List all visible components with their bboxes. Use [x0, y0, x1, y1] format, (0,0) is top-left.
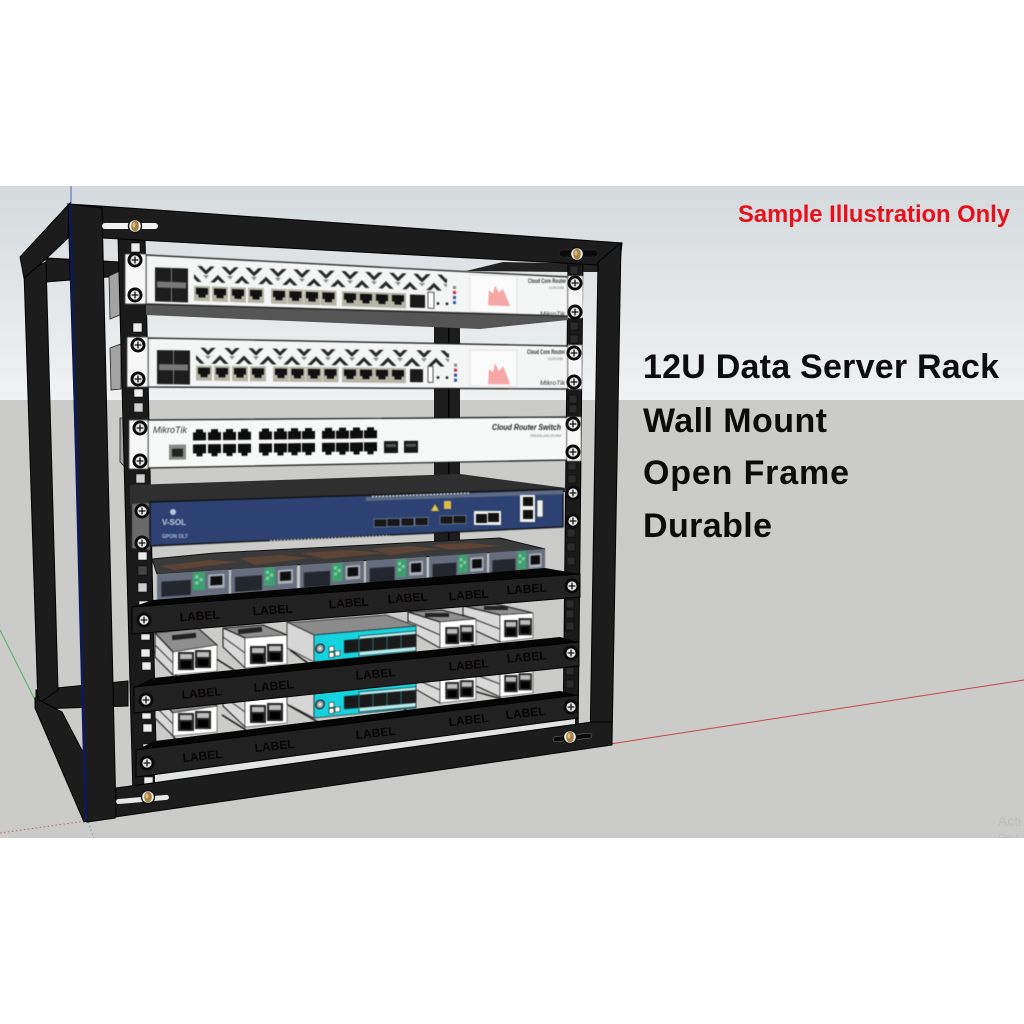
post navy edge — [70, 205, 86, 820]
bracket 3 with labels: LABEL — [355, 724, 396, 742]
device 1: shelf — [146, 304, 568, 329]
bracket 3 with labels — [136, 691, 578, 777]
light strip behind lower bracket — [155, 719, 575, 783]
bracket 1 with labels: LABEL — [506, 581, 547, 597]
model axes — [0, 186, 1024, 838]
device 3: Cloud Router Switch: Cloud Router Switch — [492, 422, 561, 432]
activation watermark — [998, 813, 1021, 844]
bracket 2 with labels — [134, 637, 579, 713]
background: sky — [0, 186, 1024, 400]
feature list: Durable — [643, 507, 772, 545]
row 5: media converters top — [152, 538, 545, 574]
device 4: V-SOL GPON OLT: V-SOL — [162, 518, 186, 527]
bottom white margin — [0, 838, 1024, 1024]
device 2: Cloud Core Router — [127, 337, 582, 389]
device 2: Cloud Core Router: CCR1036 — [548, 357, 563, 361]
bracket 3 with labels: LABEL — [448, 711, 489, 729]
back frame: top right wedge — [466, 262, 598, 272]
feature list: Open Frame — [643, 454, 849, 492]
bracket 3 with labels: LABEL — [505, 704, 546, 722]
bottom frame rail — [115, 722, 612, 817]
device 4: V-SOL GPON OLT — [132, 489, 563, 550]
bracket 2 with labels: LABEL — [181, 684, 222, 702]
mounting screws — [128, 252, 582, 770]
bracket 2 with labels: LABEL — [253, 677, 294, 695]
device 4: shelf top — [130, 474, 566, 505]
device 3: Cloud Router Switch: CRS326-24G-2S+RM — [530, 433, 561, 438]
bracket 1 with labels: LABEL — [387, 590, 428, 606]
bracket 3 with labels: LABEL — [254, 737, 295, 755]
right front post — [590, 243, 621, 746]
sample notice: Sample Illustration Only — [738, 201, 1011, 228]
front rack rails — [118, 236, 583, 796]
device 3: Cloud Router Switch: MikroTik — [153, 425, 188, 436]
activation watermark: Acti — [998, 813, 1021, 829]
activation watermark: Go t — [998, 832, 1019, 844]
back frame: left side — [20, 203, 128, 822]
row 7: white PoE modules and switch — [155, 658, 540, 740]
bracket 2 with labels: LABEL — [506, 648, 547, 666]
bracket 2 with labels: LABEL — [355, 665, 396, 683]
device 4: V-SOL GPON OLT: GPON OLT — [162, 534, 188, 540]
device 1: Cloud Core Router: CCR1036 — [549, 286, 564, 290]
bracket 1 with labels — [132, 568, 580, 634]
bracket 1 with labels: LABEL — [328, 595, 369, 611]
bracket 1 with labels: LABEL — [252, 602, 293, 618]
device 1: Cloud Core Router — [125, 254, 583, 318]
top frame rail — [68, 204, 622, 265]
rail holes: left — [131, 243, 153, 784]
device 2: Cloud Core Router: MikroTik — [540, 380, 566, 387]
bracket 1 with labels: LABEL — [448, 587, 489, 603]
device 3: Cloud Router Switch — [129, 417, 581, 469]
rail holes: right — [566, 266, 578, 688]
bracket 3 with labels: LABEL — [182, 747, 223, 765]
bracket 1 with labels: LABEL — [179, 608, 220, 624]
device 1: Cloud Core Router: MikroTik — [540, 311, 566, 318]
row 5: top surface copper tint — [160, 543, 500, 570]
back frame: centre post — [434, 320, 460, 560]
bracket 2 with labels: LABEL — [448, 656, 489, 674]
row 5: media converters — [157, 549, 545, 608]
device 1: Cloud Core Router: Cloud Core Router — [528, 278, 566, 285]
device 2: Cloud Core Router: Cloud Core Router — [527, 349, 565, 356]
rear device ears — [109, 271, 128, 470]
feature list — [643, 348, 999, 545]
background: ground — [0, 400, 1024, 838]
feature list: 12U Data Server Rack — [643, 348, 999, 386]
row 6: white PoE modules and switch — [152, 603, 533, 680]
bolt slots and brass bolts — [102, 220, 598, 804]
feature list: Wall Mount — [643, 402, 827, 440]
left front post — [68, 204, 116, 822]
